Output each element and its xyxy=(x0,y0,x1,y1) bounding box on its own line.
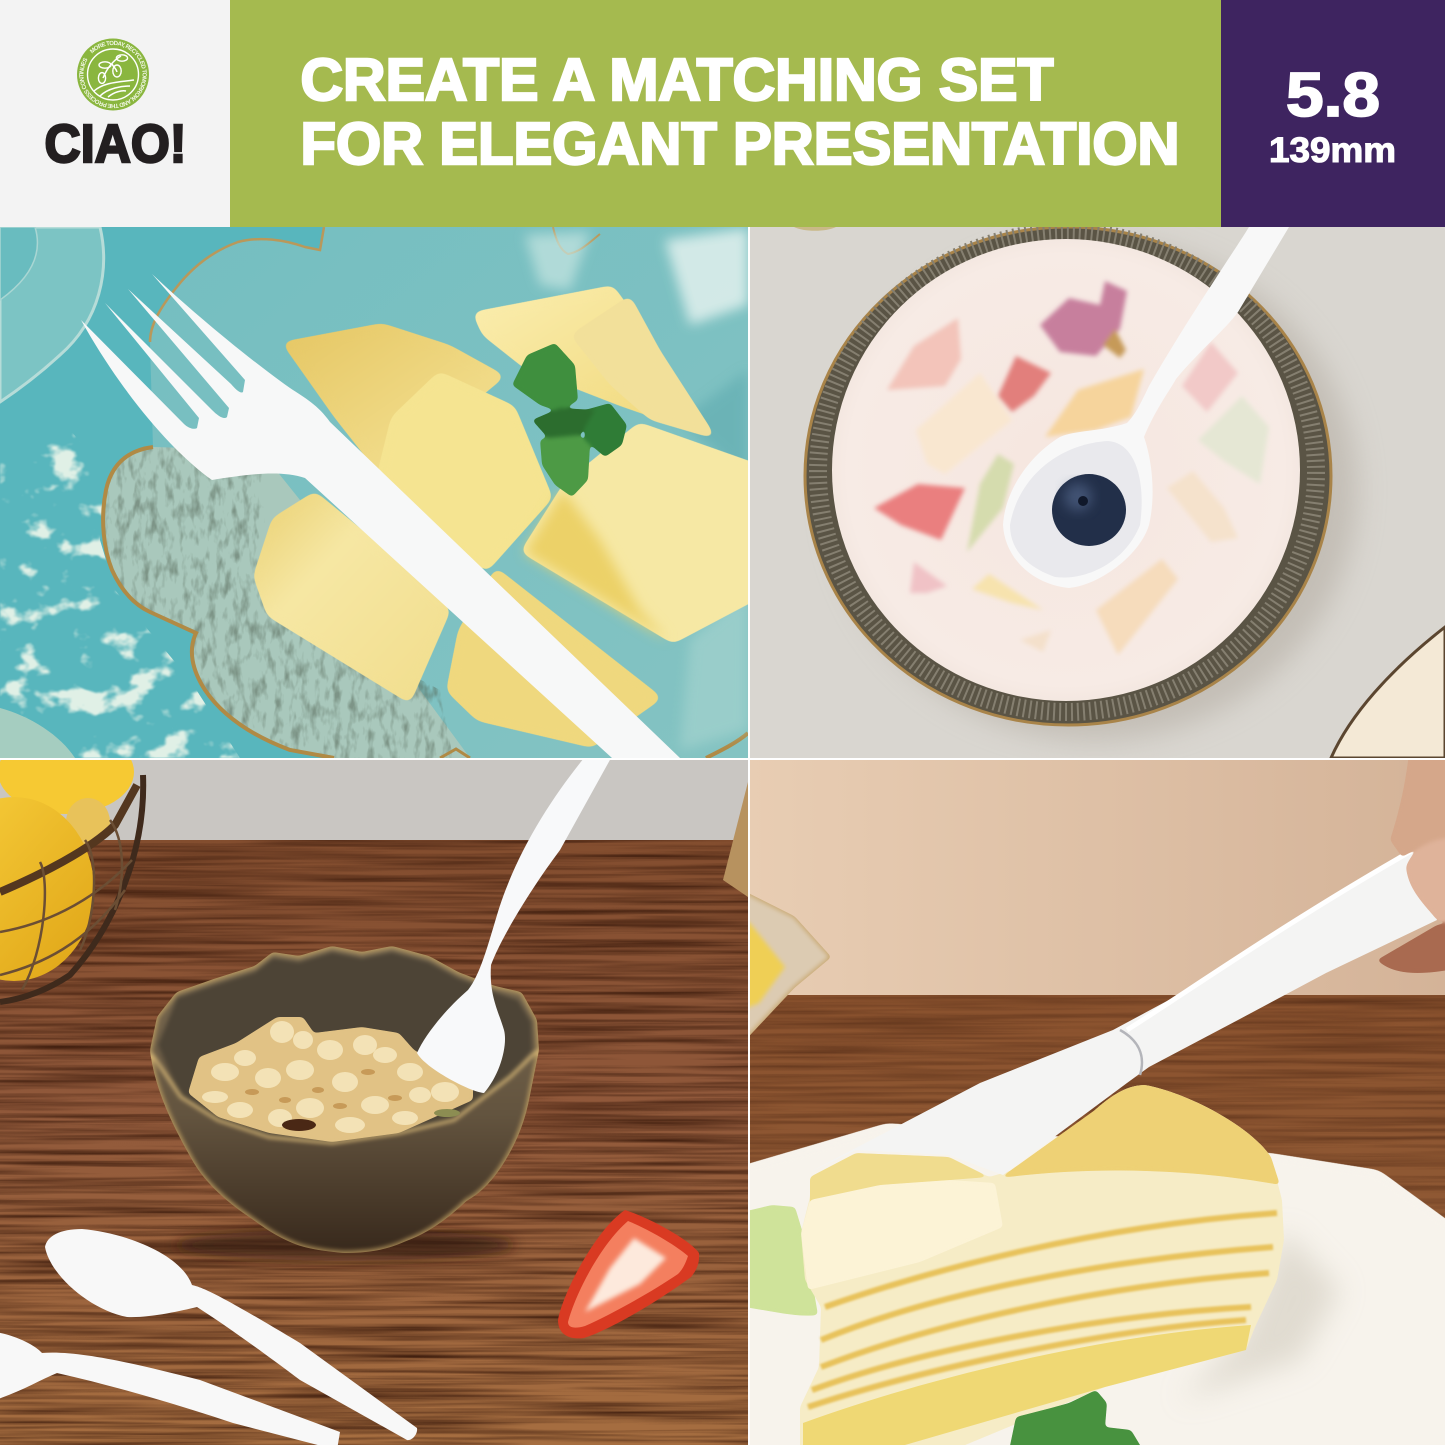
bowl shadow xyxy=(917,241,1364,747)
plate shadow xyxy=(1196,1235,1341,1395)
wooden post behind xyxy=(723,782,748,897)
spoon on table, lower xyxy=(0,1332,340,1445)
neighbouring plate xyxy=(1331,627,1445,758)
white plate xyxy=(710,1123,1445,1445)
photo: spoon in fruit milk bowl xyxy=(750,226,1445,758)
glass dish xyxy=(100,227,748,758)
title line 1: CREATE A MATCHING SET xyxy=(300,47,1054,113)
strawberry half xyxy=(558,1210,699,1338)
mint sprig xyxy=(512,343,627,497)
photo: fork with pineapple in glass dish xyxy=(0,227,775,758)
neighbouring dish rim xyxy=(794,227,836,231)
spoon on table, upper xyxy=(45,1229,417,1440)
pineapple chunks xyxy=(253,285,775,748)
milk xyxy=(832,239,1300,701)
cake top dome xyxy=(1000,1085,1280,1185)
ribbed glass bowl xyxy=(151,947,538,1252)
photo: spoon and granola on wooden table xyxy=(0,730,748,1445)
ceramic bowl xyxy=(804,226,1332,726)
title line 2: FOR ELEGANT PRESENTATION xyxy=(300,111,1180,177)
wood grain xyxy=(0,840,748,1445)
plastic spoon xyxy=(1003,227,1289,588)
blueberry xyxy=(1052,474,1126,546)
wood grain xyxy=(750,995,1445,1216)
granola xyxy=(188,1017,473,1142)
mille crepe cake xyxy=(800,1085,1284,1445)
hand xyxy=(1377,745,1445,973)
small glass plate xyxy=(0,227,104,402)
logo panel xyxy=(0,0,230,227)
lettuce xyxy=(750,1205,818,1316)
concrete wall xyxy=(0,760,748,840)
cream filling chunk xyxy=(801,1180,1003,1290)
small glass dish with pineapple xyxy=(750,894,830,1035)
brand name: CIAO! xyxy=(44,114,186,174)
spoon in bowl xyxy=(417,758,611,1093)
table shadow xyxy=(175,1229,515,1261)
plastic fork xyxy=(81,274,680,758)
lemon basket xyxy=(0,730,143,1002)
size in inches: 5.8 xyxy=(1286,61,1380,130)
size badge xyxy=(1221,0,1445,227)
fruit pieces xyxy=(874,281,1269,655)
size in millimetres: 139mm xyxy=(1269,131,1396,170)
title banner xyxy=(230,0,1221,227)
crepe layers xyxy=(808,1213,1277,1407)
glass in lower corner xyxy=(0,708,75,758)
photo: knife cutting mille crepe cake xyxy=(710,745,1445,1445)
white painted texture xyxy=(0,430,240,758)
plastic knife xyxy=(810,848,1437,1175)
wooden table corner xyxy=(733,1385,750,1445)
icon: CIAO round leaf badge: MORE TODAY, RECYCLED TOMORROW, AND THE PROCESS CONTINUES xyxy=(79,40,147,108)
mint garnish xyxy=(1007,1390,1149,1445)
sponge base xyxy=(803,1325,1251,1445)
